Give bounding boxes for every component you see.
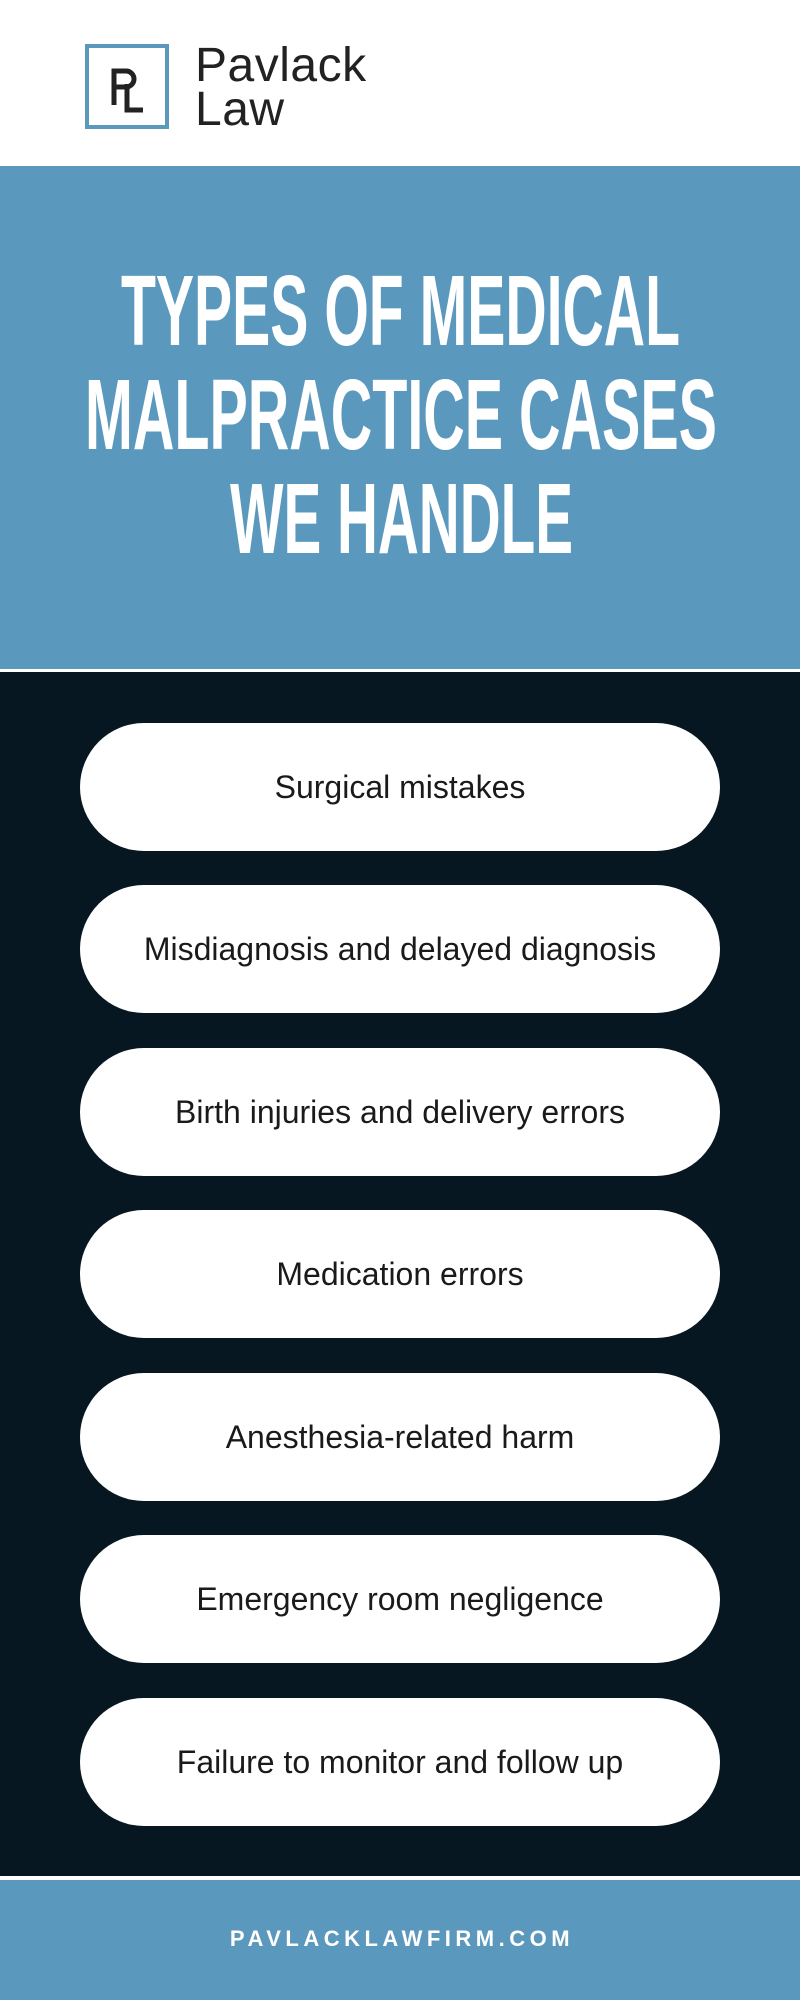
logo xyxy=(85,39,367,136)
pill: emergency: Emergency room negligence xyxy=(196,1580,604,1616)
pill: surgical: Surgical mistakes xyxy=(275,768,525,804)
title xyxy=(85,255,717,575)
pill: emergency xyxy=(80,1535,720,1663)
title panel xyxy=(0,166,800,669)
footer xyxy=(0,1880,800,2000)
logo text: Pavlack xyxy=(195,39,367,92)
pill: surgical xyxy=(80,723,720,851)
pill: anesthesia: Anesthesia-related harm xyxy=(226,1418,574,1454)
icon: PL monogram xyxy=(85,44,169,129)
logo text xyxy=(195,39,367,136)
pill: failure xyxy=(80,1698,720,1826)
pill: anesthesia xyxy=(80,1373,720,1501)
pill: failure: Failure to monitor and follow up xyxy=(177,1744,623,1780)
pill: birth xyxy=(80,1048,720,1176)
pill: medication: Medication errors xyxy=(276,1256,524,1292)
footer url: PAVLACKLAWFIRM.COM xyxy=(230,1926,574,1951)
pill: birth: Birth injuries and delivery errors xyxy=(175,1094,625,1130)
logo text: Law xyxy=(195,83,285,136)
pill: misdiagnosis: Misdiagnosis and delayed diagnosis xyxy=(144,930,656,966)
pill: medication xyxy=(80,1210,720,1338)
dark panel: list xyxy=(0,672,800,1876)
pill: misdiagnosis xyxy=(80,885,720,1013)
